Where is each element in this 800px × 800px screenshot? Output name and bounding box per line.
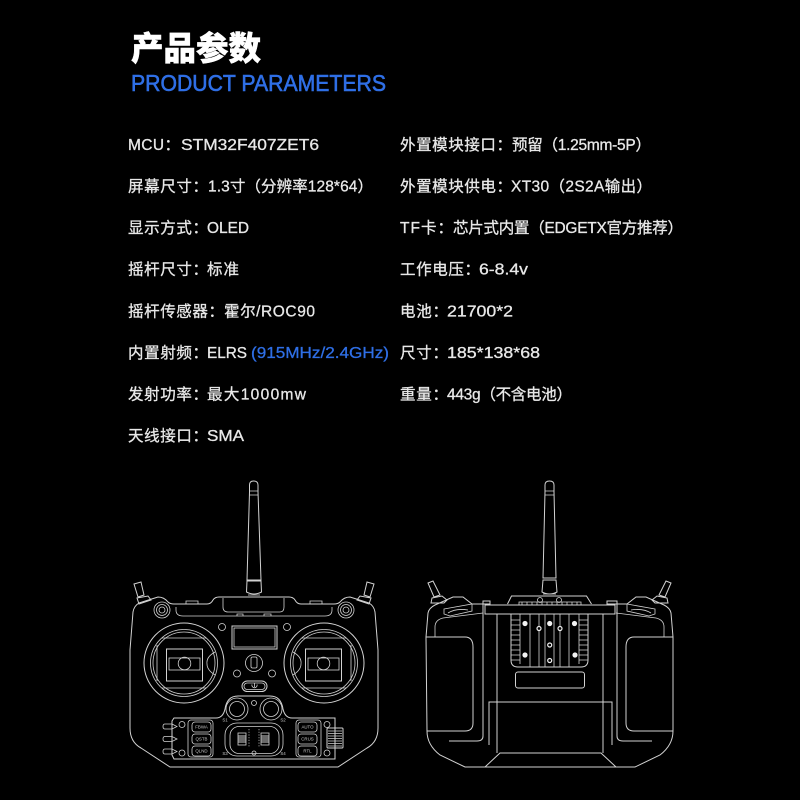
spec row: internal RF: 内置射频： — [128, 344, 208, 362]
right button group: CRUS — [301, 736, 314, 742]
spec row: battery: 21700*2 — [447, 304, 513, 320]
spec row: stick size — [128, 260, 239, 278]
spec row: screen size — [128, 178, 373, 196]
right stick gimbal — [284, 623, 364, 703]
spec row: external module port — [400, 136, 651, 154]
left button group — [188, 720, 213, 757]
left stick gimbal — [144, 623, 224, 703]
spec row: operating voltage: 工作电压： — [400, 260, 480, 278]
back view of transmitter — [426, 481, 673, 767]
antenna — [246, 481, 262, 595]
bottom trapezoid — [485, 753, 616, 767]
spec row: external module port: 外置模块接口： — [400, 136, 512, 154]
left shoulder plate — [444, 604, 472, 616]
spec row: MCU: MCU： — [128, 137, 180, 154]
module bay — [511, 614, 588, 667]
spec row: battery — [400, 302, 513, 320]
spec row: stick sensor: 摇杆传感器： — [128, 302, 224, 320]
spec row: dimensions: 185*138*68 — [447, 345, 540, 362]
spec row: internal RF: ELRS — [207, 345, 247, 362]
spec row: dimensions: 尺寸： — [400, 344, 448, 362]
aux knobs — [226, 698, 282, 720]
hump detail — [519, 598, 581, 605]
right button group: AUTO — [301, 724, 314, 730]
spec row: weight — [400, 386, 572, 404]
panel screws — [179, 722, 330, 756]
spec row: display type: OLED — [207, 220, 249, 237]
spec row: TF card: TF卡： — [400, 219, 453, 237]
battery cover — [489, 702, 612, 745]
subtitle: PRODUCT PARAMETERS — [131, 70, 386, 96]
spec row: stick sensor: 霍尔/ROC90 — [224, 302, 315, 320]
spec row: transmit power — [128, 386, 307, 404]
front view of transmitter — [130, 481, 378, 767]
spec row: stick size: 摇杆尺寸： — [128, 260, 208, 278]
left toggle switch — [428, 581, 447, 603]
spec row: antenna connector — [128, 427, 245, 445]
left toggle switch — [134, 582, 151, 604]
spec row: weight: 443g（不含电池） — [447, 386, 572, 404]
right button group — [296, 720, 321, 757]
spec row: dimensions — [400, 344, 540, 362]
right button group: RTL — [303, 748, 312, 754]
spec row: internal RF — [128, 344, 389, 362]
spec row: external module power: XT30（2S2A输出） — [511, 178, 652, 196]
right shoulder plate — [627, 604, 655, 616]
lower control panel — [172, 696, 335, 759]
switch labels: S3 — [222, 751, 228, 756]
left trim knob — [154, 602, 170, 618]
scroll wheel — [327, 728, 343, 748]
upper hump and top bar — [483, 596, 617, 614]
spec row: stick sensor — [128, 302, 315, 320]
centre switch bay — [225, 723, 283, 756]
spec row: external module power: 外置模块供电： — [400, 178, 512, 196]
spec row: internal RF: (915MHz/2.4GHz) — [251, 345, 389, 362]
left button group: QSTB — [196, 736, 208, 742]
spec row: operating voltage: 6-8.4v — [479, 262, 528, 278]
spec row: external module power — [400, 178, 652, 196]
body outline — [426, 597, 673, 767]
inner shoulder lines — [435, 613, 664, 637]
top edge recess — [176, 598, 332, 616]
left side lugs — [163, 724, 177, 754]
spec row: screen size: 1.3寸（分辨率128*64） — [208, 178, 373, 196]
spec row: antenna connector: SMA — [207, 428, 245, 445]
centre holes and dial — [218, 624, 290, 677]
right toggle switch — [652, 581, 671, 603]
switch labels: S4 — [280, 751, 286, 756]
spec row: external module port: 预留（1.25mm-5P） — [512, 136, 651, 154]
spec row: display type — [128, 219, 249, 237]
spec row: battery: 电池： — [400, 302, 448, 320]
back label recess — [516, 672, 584, 688]
switch labels: S1 — [222, 718, 228, 722]
spec row: weight: 重量： — [400, 386, 448, 404]
left grip — [426, 637, 473, 731]
body vertical lines — [449, 604, 652, 753]
spec row: display type: 显示方式： — [128, 219, 208, 237]
antenna — [542, 481, 557, 594]
left button group: FBWA — [195, 724, 208, 730]
spec row: transmit power: 最大1000mw — [207, 386, 307, 404]
switch labels — [222, 718, 286, 756]
OLED screen — [232, 626, 277, 649]
spec row: transmit power: 发射功率： — [128, 386, 208, 404]
spec row: MCU: STM32F407ZET6 — [181, 137, 319, 154]
power button — [242, 681, 267, 692]
switch labels: S2 — [280, 718, 286, 722]
spec row: antenna connector: 天线接口： — [128, 427, 208, 445]
spec row: screen size: 屏幕尺寸： — [128, 178, 208, 196]
left button group: QLND — [195, 748, 208, 754]
spec row: MCU — [128, 137, 319, 154]
body outline — [130, 597, 378, 767]
spec row: stick size: 标准 — [207, 260, 239, 278]
right toggle switch — [357, 582, 374, 604]
right trim knob — [338, 602, 354, 618]
spec row: operating voltage — [400, 260, 528, 278]
right grip — [626, 637, 673, 731]
title: 产品参数 — [131, 30, 261, 67]
spec row: TF card: 芯片式内置（EDGETX官方推荐） — [453, 219, 683, 237]
